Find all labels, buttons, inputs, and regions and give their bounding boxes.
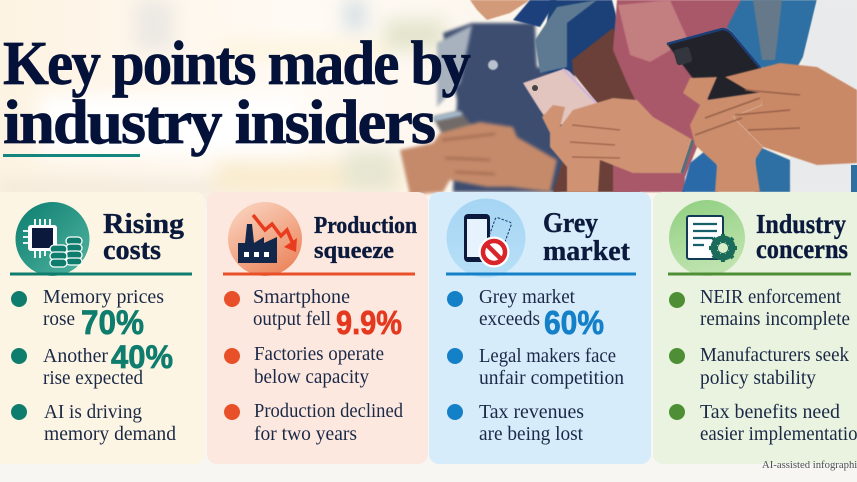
text: NEIR enforcement remains incomplete: NEIR enforcement — [700, 286, 841, 308]
heading: Rising — [103, 209, 184, 240]
heading: Industry — [756, 209, 846, 239]
text: another 40% rise expected: rise expected — [43, 367, 143, 389]
bullets — [447, 291, 463, 420]
panel: production squeeze — [207, 192, 428, 464]
text: tax revenues are being lost — [479, 401, 584, 445]
text: tax benefits need easier implementation: Tax benefits need — [700, 401, 840, 423]
text: grey market exceeds 60%: 60% — [544, 304, 604, 341]
text: grey market exceeds 60%: exceeds — [479, 308, 540, 330]
text: NEIR enforcement remains incomplete: remains incomplete — [700, 308, 850, 330]
icon: document and gear — [669, 200, 745, 276]
heading — [756, 209, 848, 264]
bullets — [11, 291, 27, 420]
panel: grey market — [429, 192, 651, 464]
pink phone — [523, 69, 600, 125]
text: memory prices rose 70%: Memory prices — [43, 286, 164, 308]
text: production declined for two years — [254, 400, 403, 445]
black phone — [667, 29, 778, 102]
text: tax revenues are being lost: Tax revenues — [479, 401, 584, 423]
text: smartphone output fell 9.9%: output fell — [253, 308, 331, 330]
hands, person 3 — [683, 77, 763, 192]
bullets — [224, 291, 240, 420]
title: Key points made by — [3, 30, 471, 98]
person 2 jacket and scarf — [553, 28, 640, 192]
heading: Grey — [543, 208, 598, 239]
text: tax revenues are being lost: are being lost — [479, 423, 583, 445]
person 1 shirt — [443, 23, 575, 192]
hands, person 2 — [542, 98, 693, 192]
title: industry insiders — [3, 89, 435, 157]
icon: factory with falling arrow — [228, 202, 302, 276]
text: manufacturers seek policy stability: policy stability — [700, 367, 816, 389]
text: tax benefits need easier implementation — [700, 401, 857, 445]
text: AI is driving memory demand: memory demand — [44, 423, 176, 445]
heading — [543, 208, 631, 267]
text: NEIR enforcement remains incomplete — [700, 286, 850, 330]
bullets — [669, 292, 685, 420]
icon: memory chip and coins — [16, 202, 90, 276]
text: another 40% rise expected — [43, 339, 173, 389]
text: production declined for two years: Production declined — [254, 400, 403, 422]
icon: phone with prohibition sign — [446, 198, 526, 278]
heading: concerns — [756, 234, 848, 264]
text: AI is driving memory demand: AI is driving — [44, 401, 142, 423]
text: memory prices rose 70%: rose — [43, 308, 75, 330]
text: factories operate below capacity — [254, 343, 384, 388]
text: another 40% rise expected: Another — [43, 345, 108, 367]
text: factories operate below capacity: below capacity — [254, 366, 369, 388]
text: production declined for two years: for two years — [254, 423, 357, 445]
person 3 denim and shirt — [727, 0, 817, 80]
text: smartphone output fell 9.9%: 9.9% — [336, 304, 402, 341]
heading: Production — [314, 213, 417, 239]
heading — [103, 209, 184, 266]
text: manufacturers seek policy stability — [700, 344, 849, 389]
text: smartphone output fell 9.9%: Smartphone — [253, 286, 350, 308]
text: smartphone output fell 9.9% — [253, 286, 402, 341]
text: legal makers face unfair competition: Legal makers face — [479, 345, 616, 367]
title underline — [3, 154, 140, 157]
text: manufacturers seek policy stability: Manufacturers seek — [700, 344, 849, 366]
text: factories operate below capacity: Factories operate — [254, 343, 384, 365]
heading: squeeze — [314, 238, 394, 264]
heading: costs — [103, 235, 161, 266]
text: another 40% rise expected: 40% — [111, 339, 173, 375]
text: memory prices rose 70% — [43, 286, 164, 342]
hands, person 1 — [400, 122, 557, 195]
heading — [314, 213, 417, 264]
text: AI is driving memory demand — [44, 401, 176, 445]
text: memory prices rose 70%: 70% — [81, 304, 144, 342]
heading: market — [543, 236, 631, 267]
text: grey market exceeds 60% — [479, 286, 604, 341]
hero photo: people using smartphones — [0, 0, 857, 196]
text: grey market exceeds 60%: Grey market — [479, 286, 575, 308]
title — [3, 30, 471, 157]
text: legal makers face unfair competition — [479, 345, 624, 389]
text: legal makers face unfair competition: unfair competition — [479, 367, 624, 389]
panel: industry concerns — [653, 192, 857, 464]
small phone — [433, 111, 478, 140]
panel: rising costs — [0, 192, 205, 464]
